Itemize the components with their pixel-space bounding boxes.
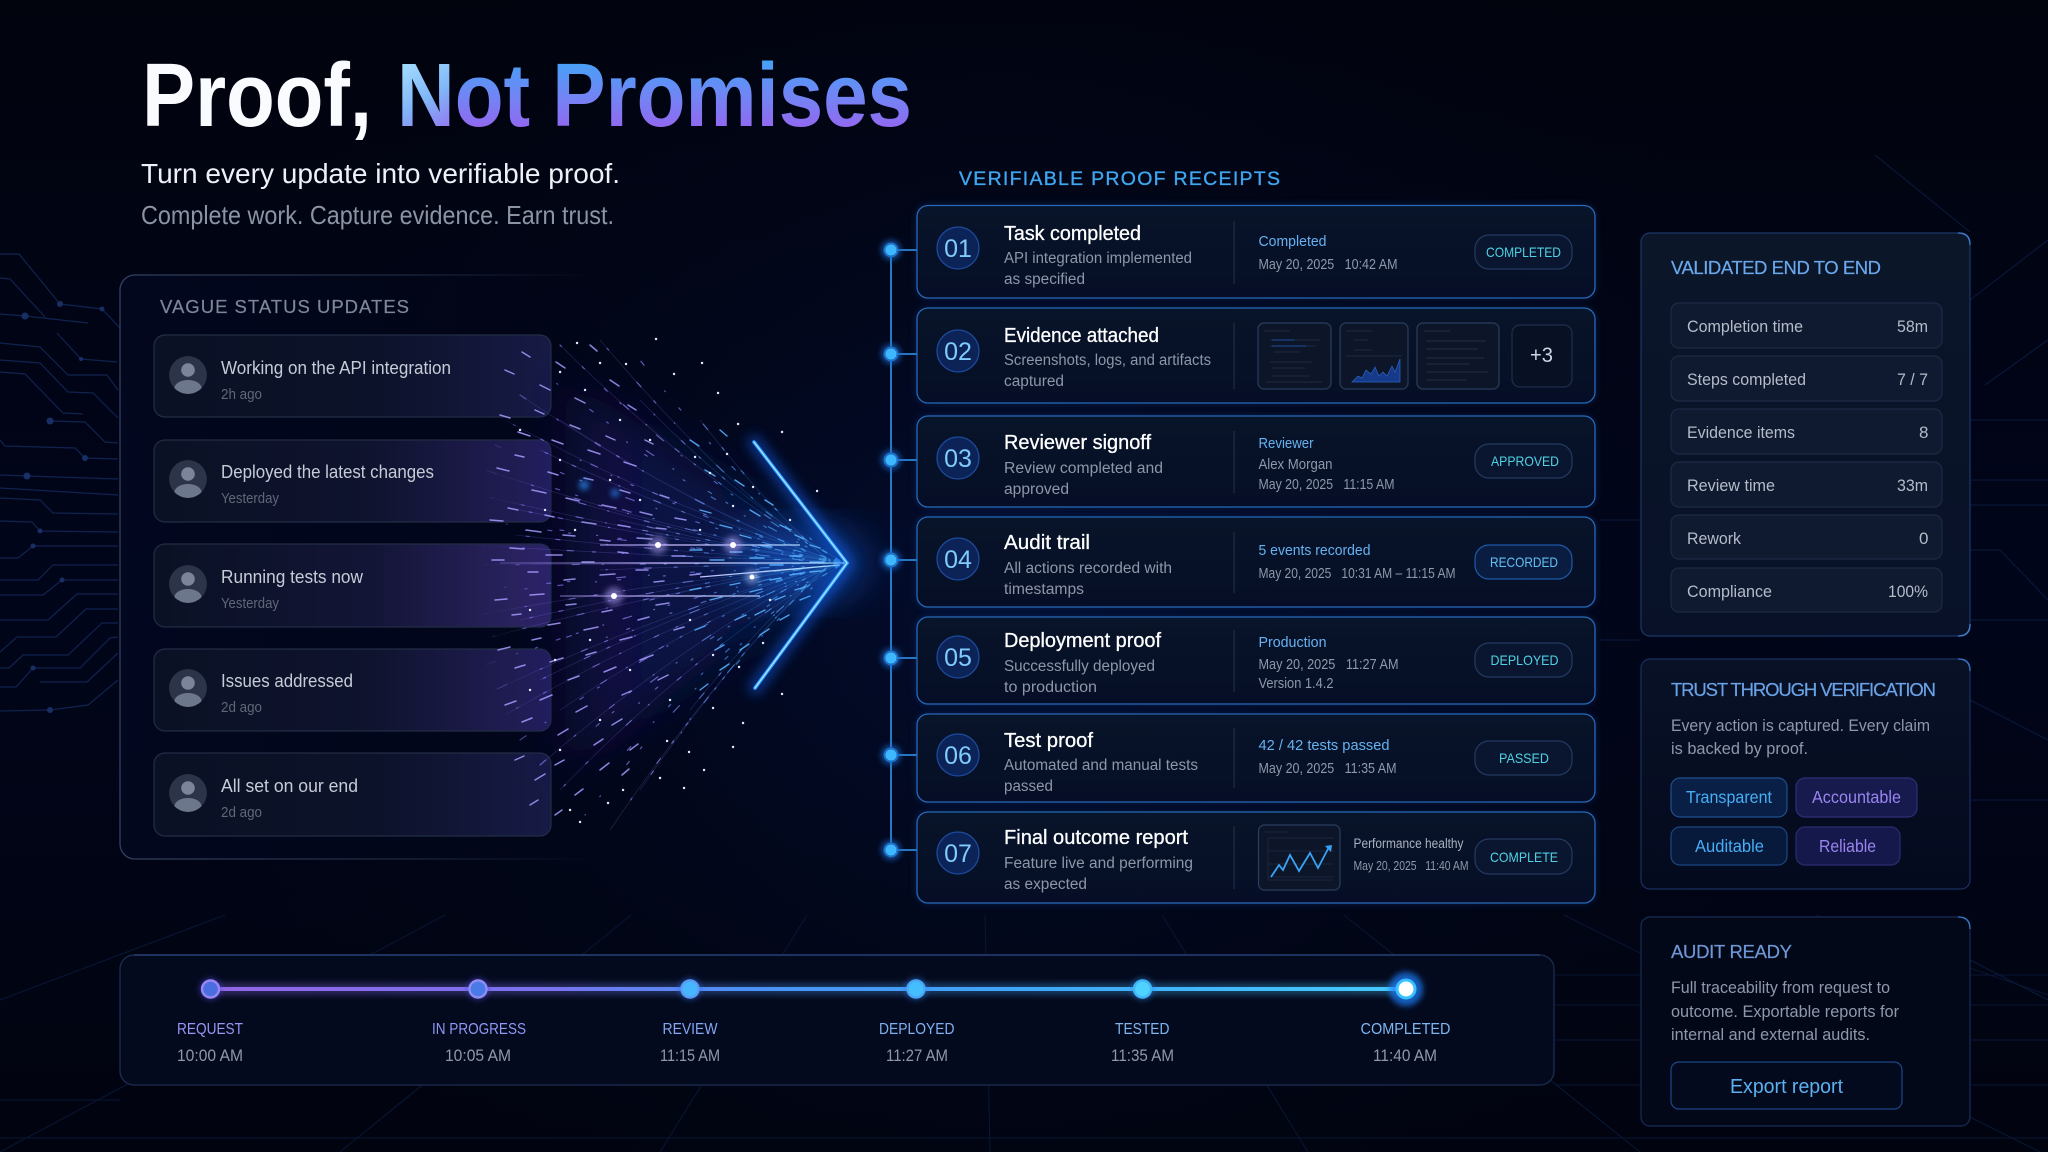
receipt 03: Reviewer signoff	[1004, 431, 1151, 454]
receipt 04	[917, 517, 1595, 607]
receipt 01: Task completed	[1004, 222, 1141, 245]
receipt 05: DEPLOYED	[1490, 652, 1558, 668]
receipt 01: 01	[944, 235, 972, 263]
tag: transparent: Transparent	[1686, 787, 1772, 807]
receipt 03: 03	[944, 445, 972, 473]
mini performance chart	[1258, 825, 1340, 890]
panel: audit ready	[1641, 917, 1970, 1126]
heading: validated end to end: VALIDATED END TO END	[1671, 257, 1881, 278]
subtitle: Turn every update into verifiable proof.	[141, 158, 620, 189]
receipt 05: Production	[1258, 635, 1326, 651]
receipt 07: Performance healthy	[1354, 836, 1464, 851]
receipt 01: COMPLETED	[1486, 244, 1561, 260]
evidence thumbnail: file list	[1417, 323, 1499, 389]
body text: internal and external audits.	[1671, 1026, 1870, 1044]
receipt 03: May 20, 2025 11:15 AM	[1258, 477, 1394, 493]
body text	[1671, 717, 1930, 758]
body text	[1671, 979, 1899, 1044]
status item 4	[154, 649, 551, 731]
receipt 06: Automated and manual tests	[1004, 757, 1198, 774]
receipt 03	[917, 416, 1595, 507]
metric: evidence items	[1671, 409, 1942, 454]
receipt 07: COMPLETE	[1490, 849, 1558, 865]
node: completed	[1360, 972, 1450, 1065]
receipt 05: May 20, 2025 11:27 AM	[1258, 657, 1398, 673]
metric: rework: Rework	[1687, 529, 1741, 548]
receipt 01: as specified	[1004, 271, 1085, 288]
receipt 07: Final outcome report	[1004, 826, 1188, 849]
metric: evidence items: 8	[1919, 423, 1928, 442]
metric: rework	[1671, 515, 1942, 559]
receipt 02: Screenshots, logs, and artifacts	[1004, 352, 1211, 369]
receipt 02: captured	[1004, 373, 1064, 390]
node: review: REVIEW	[662, 1021, 718, 1038]
subtitle: Complete work. Capture evidence. Earn trust.	[141, 200, 614, 230]
tag: reliable: Reliable	[1819, 836, 1876, 856]
body text: is backed by proof.	[1671, 740, 1808, 758]
receipt 01	[917, 206, 1595, 298]
button: export report	[1671, 1062, 1902, 1109]
metric: steps completed: Steps completed	[1687, 370, 1806, 389]
node: completed: COMPLETED	[1360, 1021, 1450, 1038]
receipt 01: API integration implemented	[1004, 250, 1192, 267]
status item 2	[154, 440, 551, 522]
receipt 01: May 20, 2025 10:42 AM	[1258, 257, 1398, 273]
node: request: REQUEST	[177, 1021, 243, 1038]
status item 3: Running tests now	[221, 567, 364, 587]
receipt 07: 07	[944, 840, 972, 868]
receipt 05: to production	[1004, 679, 1097, 696]
receipt 04: May 20, 2025 10:31 AM – 11:15 AM	[1258, 566, 1456, 582]
evidence thumbnail: logs	[1258, 323, 1331, 389]
node: tested	[1111, 978, 1174, 1065]
receipt 01: Completed	[1258, 234, 1326, 250]
receipt 07	[917, 812, 1595, 903]
status item 4: 2d ago	[221, 700, 262, 716]
receipt 03: Alex Morgan	[1258, 457, 1332, 473]
metric: compliance	[1671, 568, 1942, 612]
node: request: 10:00 AM	[177, 1047, 243, 1065]
receipt 04: 5 events recorded	[1258, 543, 1370, 559]
status item 2: Deployed the latest changes	[221, 462, 434, 482]
tag: auditable: Auditable	[1695, 836, 1764, 856]
tag: accountable: Accountable	[1812, 787, 1901, 807]
tag: auditable	[1671, 827, 1787, 865]
tag: reliable	[1796, 827, 1900, 865]
status item 3	[154, 544, 551, 627]
metric: review time: Review time	[1687, 476, 1775, 495]
receipt 03: Review completed and	[1004, 460, 1163, 477]
heading: trust through verification: TRUST THROUGH VERIFICATION	[1671, 679, 1936, 700]
receipt 02	[917, 308, 1595, 403]
receipt 06: May 20, 2025 11:35 AM	[1258, 761, 1396, 777]
title: Proof,	[142, 46, 372, 146]
metric: review time	[1671, 462, 1942, 507]
metric: steps completed: 7 / 7	[1897, 370, 1928, 389]
node: deployed	[879, 978, 954, 1065]
receipt 07: Feature live and performing	[1004, 855, 1193, 872]
status item 5	[154, 753, 551, 836]
status item 2: Yesterday	[221, 491, 280, 507]
receipt 04: timestamps	[1004, 581, 1084, 598]
metric: completion time: 58m	[1897, 317, 1928, 336]
node: review: 11:15 AM	[660, 1047, 720, 1065]
metric: completion time	[1671, 303, 1942, 348]
metric: review time: 33m	[1897, 476, 1928, 495]
node: review	[660, 978, 720, 1065]
node: in progress: IN PROGRESS	[432, 1021, 526, 1038]
receipt 05: 05	[944, 644, 972, 672]
receipt 06: Test proof	[1004, 729, 1093, 752]
metric: compliance: 100%	[1888, 582, 1928, 601]
panel: progress timeline	[120, 955, 1554, 1085]
body text: Every action is captured. Every claim	[1671, 717, 1930, 735]
metric: compliance: Compliance	[1687, 582, 1772, 601]
status item 1: 2h ago	[221, 387, 262, 403]
receipt 05: Deployment proof	[1004, 629, 1161, 652]
status item 3: Yesterday	[221, 596, 280, 612]
receipt 05: Version 1.4.2	[1258, 676, 1334, 692]
button: export report: Export report	[1730, 1076, 1843, 1098]
metric: rework: 0	[1919, 529, 1928, 548]
receipt 06: 06	[944, 742, 972, 770]
receipt 03: APPROVED	[1491, 453, 1559, 469]
panel: validated end to end	[1641, 233, 1970, 636]
particle stream converging to arrow	[476, 339, 870, 830]
status item 1	[154, 335, 551, 417]
receipt 03: approved	[1004, 481, 1069, 498]
receipt 04: 04	[944, 546, 972, 574]
status item 5: All set on our end	[221, 776, 358, 796]
heading: vague status updates: VAGUE STATUS UPDATES	[160, 296, 409, 317]
body text: Full traceability from request to	[1671, 979, 1890, 997]
receipt 07: as expected	[1004, 876, 1087, 893]
receipt 04: Audit trail	[1004, 531, 1090, 554]
node: in progress	[432, 978, 526, 1065]
status item 5: 2d ago	[221, 805, 262, 821]
node: tested: 11:35 AM	[1111, 1047, 1174, 1065]
receipt 06: passed	[1004, 778, 1053, 795]
receipt 05: Successfully deployed	[1004, 658, 1155, 675]
metric: evidence items: Evidence items	[1687, 423, 1795, 442]
panel: trust through verification	[1641, 659, 1970, 889]
title: Not Promises	[397, 46, 912, 146]
receipt 04: RECORDED	[1490, 554, 1558, 570]
receipt 04: All actions recorded with	[1004, 560, 1172, 577]
receipt 02: 02	[944, 338, 972, 366]
receipt 06: PASSED	[1499, 750, 1549, 766]
status item 4: Issues addressed	[221, 671, 353, 691]
receipt 06: 42 / 42 tests passed	[1258, 738, 1390, 754]
heading: verifiable proof receipts: VERIFIABLE PROOF RECEIPTS	[959, 168, 1280, 190]
subtitle	[141, 158, 620, 230]
title	[142, 46, 912, 146]
timeline line	[210, 983, 1406, 995]
node: completed: 11:40 AM	[1373, 1047, 1437, 1065]
node: in progress: 10:05 AM	[445, 1047, 511, 1065]
node: deployed: 11:27 AM	[886, 1047, 948, 1065]
evidence count: +3: +3	[1530, 344, 1553, 367]
node: tested: TESTED	[1115, 1021, 1170, 1038]
metric: steps completed	[1671, 356, 1942, 401]
metric: completion time: Completion time	[1687, 317, 1803, 336]
tag: accountable	[1796, 778, 1917, 817]
icon: glowing chevron arrow	[754, 442, 847, 688]
receipt 06	[917, 714, 1595, 802]
evidence count: +3	[1512, 325, 1572, 387]
receipt 05	[917, 617, 1595, 704]
tag: transparent	[1671, 778, 1787, 817]
receipt 02: Evidence attached	[1004, 324, 1159, 347]
panel: vague status updates	[119, 274, 565, 860]
heading: audit ready: AUDIT READY	[1671, 941, 1792, 962]
receipt 07: May 20, 2025 11:40 AM	[1354, 858, 1468, 873]
receipt 03: Reviewer	[1258, 436, 1314, 452]
body text: outcome. Exportable reports for	[1671, 1003, 1899, 1021]
node: request	[177, 978, 243, 1065]
evidence thumbnail: chart	[1340, 323, 1408, 389]
node: deployed: DEPLOYED	[879, 1021, 954, 1038]
receipt connector rail	[881, 240, 917, 860]
status item 1: Working on the API integration	[221, 358, 451, 378]
